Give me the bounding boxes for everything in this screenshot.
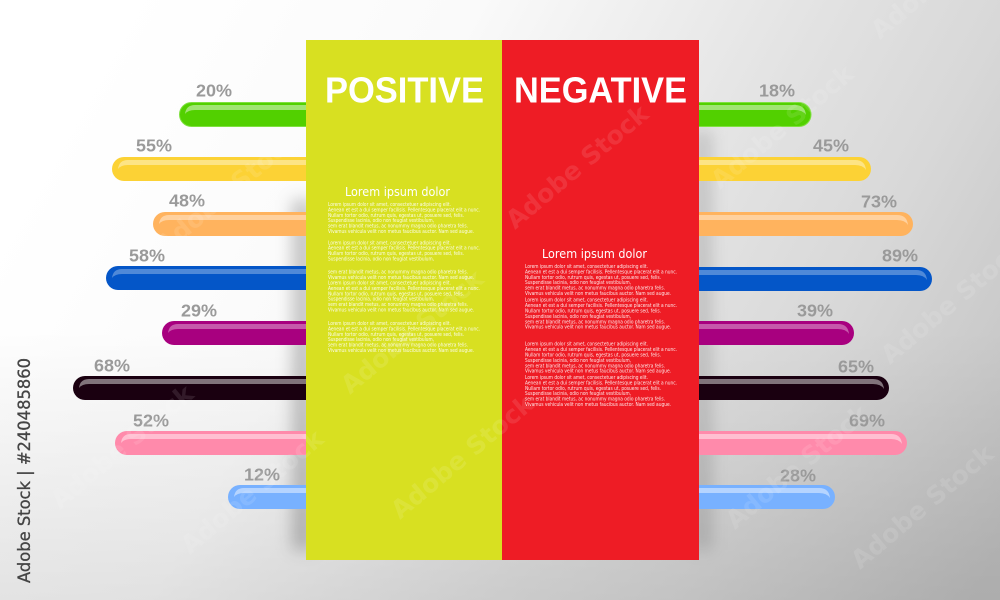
label: 12%: 12% [244, 464, 280, 484]
stock id caption: Adobe Stock | #240485860 [15, 358, 35, 583]
left bars: positive side [73, 80, 323, 509]
watermark pattern: Adobe Stock [705, 58, 860, 195]
bar: light blue 28% [685, 485, 835, 509]
panel shadows [292, 130, 712, 550]
text block: negative paragraphs: sem erat blandit metus, ac nonummy magna odio pharetra felis. [525, 319, 665, 325]
bar: light blue 12% [228, 485, 320, 509]
label: 68%: 68% [94, 356, 130, 376]
bar: purple 29% [162, 321, 322, 345]
watermark pattern: Adobe Stock [385, 388, 540, 525]
text block: positive paragraphs: Lorem ipsum dolor sit amet, consectetuer adipiscing elit. [328, 240, 451, 246]
text block: positive paragraphs: Nullam tortor odio, rutrum quis, egestas ut, posuere sed, felis. [328, 251, 464, 257]
text block: positive paragraphs: Suspendisse lacinia, odio non feugiat vestibulum, [328, 256, 434, 262]
label: 58%: 58% [129, 246, 165, 266]
text block: positive paragraphs: sem erat blandit metus, ac nonummy magna odio pharetra felis. [328, 343, 468, 349]
text block: positive paragraphs: Aenean et est a dui semper facilisis. Pellentesque placerat elit a nunc. [328, 286, 480, 292]
text block: negative paragraphs: Lorem ipsum dolor sit amet, consectetuer adipiscing elit. [525, 264, 648, 270]
text block: positive paragraphs: sem erat blandit metus, ac nonummy magna odio pharetra felis. [328, 270, 468, 276]
panel: positive [306, 40, 502, 560]
label: 69%: 69% [849, 410, 885, 430]
watermark pattern: Adobe Stock [500, 98, 655, 235]
bar: purple 39% [685, 321, 854, 345]
text block: negative paragraphs: Vivamus vehicula velit non metus faucibus auctor. Nam sed augue. [525, 402, 671, 408]
text block: negative paragraphs: sem erat blandit metus, ac nonummy magna odio pharetra felis. [525, 286, 665, 292]
bar: blue 89% [685, 267, 932, 291]
panel: negative [502, 40, 699, 560]
text block: positive paragraphs: Vivamus vehicula velit non metus faucibus auctor. Nam sed augue. [328, 275, 474, 281]
text block: positive paragraphs: Aenean et est a dui semper facilisis. Pellentesque placerat elit a nunc. [328, 246, 480, 252]
label: 28%: 28% [780, 466, 816, 486]
text block: positive paragraphs: Aenean et est a dui semper facilisis. Pellentesque placerat elit a nunc. [328, 326, 480, 332]
text block: positive paragraphs: Vivamus vehicula velit non metus faucibus auctor. Nam sed augue. [328, 348, 474, 354]
bar: blue 58% [106, 266, 321, 290]
text block: positive paragraphs: sem erat blandit metus, ac nonummy magna odio pharetra felis. [328, 302, 468, 308]
text block: negative paragraphs: Vivamus vehicula velit non metus faucibus auctor. Nam sed augue. [525, 291, 671, 297]
text block: negative paragraphs: Suspendisse lacinia, odio non feugiat vestibulum, [525, 358, 631, 364]
label: 73%: 73% [861, 192, 897, 212]
text block: positive paragraphs: Vivamus vehicula velit non metus faucibus auctor. Nam sed augue. [328, 229, 474, 235]
label: 20%: 20% [196, 80, 232, 100]
bar: yellow 45% [685, 157, 871, 181]
text block: negative paragraphs: sem erat blandit metus, ac nonummy magna odio pharetra felis. [525, 397, 665, 403]
bar: green 20% [180, 102, 320, 126]
text block: negative paragraphs: sem erat blandit metus, ac nonummy magna odio pharetra felis. [525, 363, 665, 369]
heading: NEGATIVE: NEGATIVE [514, 70, 687, 110]
text block: negative paragraphs: Lorem ipsum dolor sit amet, consectetuer adipiscing elit. [525, 342, 648, 348]
text block: positive paragraphs: Aenean et est a dui semper facilisis. Pellentesque placerat elit a nunc. [328, 207, 480, 213]
bar: orange 48% [153, 212, 323, 236]
watermark pattern: Adobe Stock [720, 398, 875, 535]
text block: positive paragraphs: Lorem ipsum dolor sit amet, consectetuer adipiscing elit. [328, 202, 451, 208]
text block: negative paragraphs: Nullam tortor odio, rutrum quis, egestas ut, posuere sed, felis. [525, 352, 661, 358]
bar: orange 73% [685, 212, 913, 236]
label: 29%: 29% [181, 300, 217, 320]
heading: POSITIVE: POSITIVE [325, 70, 484, 110]
label: 89%: 89% [882, 246, 918, 266]
bar: green 18% [685, 102, 811, 126]
subheading: positive: Lorem ipsum dolor [345, 185, 450, 199]
text block: positive paragraphs: Lorem ipsum dolor sit amet, consectetuer adipiscing elit. [328, 280, 451, 286]
text block: negative paragraphs: Aenean et est a dui semper facilisis. Pellentesque placerat elit a nunc. [525, 269, 677, 275]
bar: black 65% [685, 376, 889, 400]
text block: positive paragraphs: Suspendisse lacinia, odio non feugiat vestibulum, [328, 218, 434, 224]
text block: negative paragraphs: Aenean et est a dui semper facilisis. Pellentesque placerat elit a nunc. [525, 303, 677, 309]
label: 52%: 52% [133, 410, 169, 430]
text block: positive paragraphs: sem erat blandit metus, ac nonummy magna odio pharetra felis. [328, 224, 468, 230]
watermark pattern: Adobe Stock [45, 378, 200, 515]
label: 18%: 18% [759, 80, 795, 100]
text block: negative paragraphs: Aenean et est a dui semper facilisis. Pellentesque placerat elit a nunc. [525, 380, 677, 386]
text block: negative paragraphs: Suspendisse lacinia, odio non feugiat vestibulum, [525, 280, 631, 286]
label: 55%: 55% [136, 136, 172, 156]
watermark pattern: Adobe Stock [845, 438, 1000, 575]
text block: negative paragraphs: Lorem ipsum dolor sit amet, consectetuer adipiscing elit. [525, 298, 648, 304]
watermark pattern: Adobe Stock [150, 123, 305, 260]
text block: positive paragraphs: Suspendisse lacinia, odio non feugiat vestibulum, [328, 297, 434, 303]
label: 39%: 39% [797, 300, 833, 320]
bar: yellow 55% [112, 157, 322, 181]
text block: negative paragraphs: Nullam tortor odio, rutrum quis, egestas ut, posuere sed, felis. [525, 275, 661, 281]
label: 65%: 65% [838, 356, 874, 376]
text block: negative paragraphs: Nullam tortor odio, rutrum quis, egestas ut, posuere sed, felis. [525, 308, 661, 314]
text block: negative paragraphs: Vivamus vehicula velit non metus faucibus auctor. Nam sed augue. [525, 369, 671, 375]
bar: black 68% [73, 376, 323, 400]
label: 48%: 48% [169, 190, 205, 210]
watermark pattern: Adobe Stock [175, 423, 330, 560]
text block: negative paragraphs: Lorem ipsum dolor sit amet, consectetuer adipiscing elit. [525, 375, 648, 381]
text block: negative paragraphs: Aenean et est a dui semper facilisis. Pellentesque placerat elit a nunc. [525, 347, 677, 353]
text block: negative paragraphs: Nullam tortor odio, rutrum quis, egestas ut, posuere sed, felis. [525, 386, 661, 392]
text block: negative paragraphs: Suspendisse lacinia, odio non feugiat vestibulum, [525, 314, 631, 320]
text block: positive paragraphs: Nullam tortor odio, rutrum quis, egestas ut, posuere sed, felis. [328, 291, 464, 297]
text block: negative paragraphs: Vivamus vehicula velit non metus faucibus auctor. Nam sed augue. [525, 325, 671, 331]
bar: pink 69% [685, 431, 907, 455]
text block: positive paragraphs: Lorem ipsum dolor sit amet, consectetuer adipiscing elit. [328, 321, 451, 327]
text block: positive paragraphs: Nullam tortor odio, rutrum quis, egestas ut, posuere sed, felis. [328, 332, 464, 338]
label: 45%: 45% [813, 136, 849, 156]
bar: pink 52% [115, 431, 320, 455]
text block: positive paragraphs: Suspendisse lacinia, odio non feugiat vestibulum, [328, 337, 434, 343]
subheading: negative: Lorem ipsum dolor [542, 247, 647, 261]
text block: negative paragraphs [525, 264, 677, 408]
watermark pattern: Adobe Stock [335, 263, 490, 400]
text block: positive paragraphs [328, 202, 480, 354]
right bars: negative side [685, 80, 932, 509]
text block: positive paragraphs: Nullam tortor odio, rutrum quis, egestas ut, posuere sed, felis. [328, 213, 464, 219]
text block: positive paragraphs: Vivamus vehicula velit non metus faucibus auctor. Nam sed augue. [328, 308, 474, 314]
text block: negative paragraphs: Suspendisse lacinia, odio non feugiat vestibulum, [525, 391, 631, 397]
